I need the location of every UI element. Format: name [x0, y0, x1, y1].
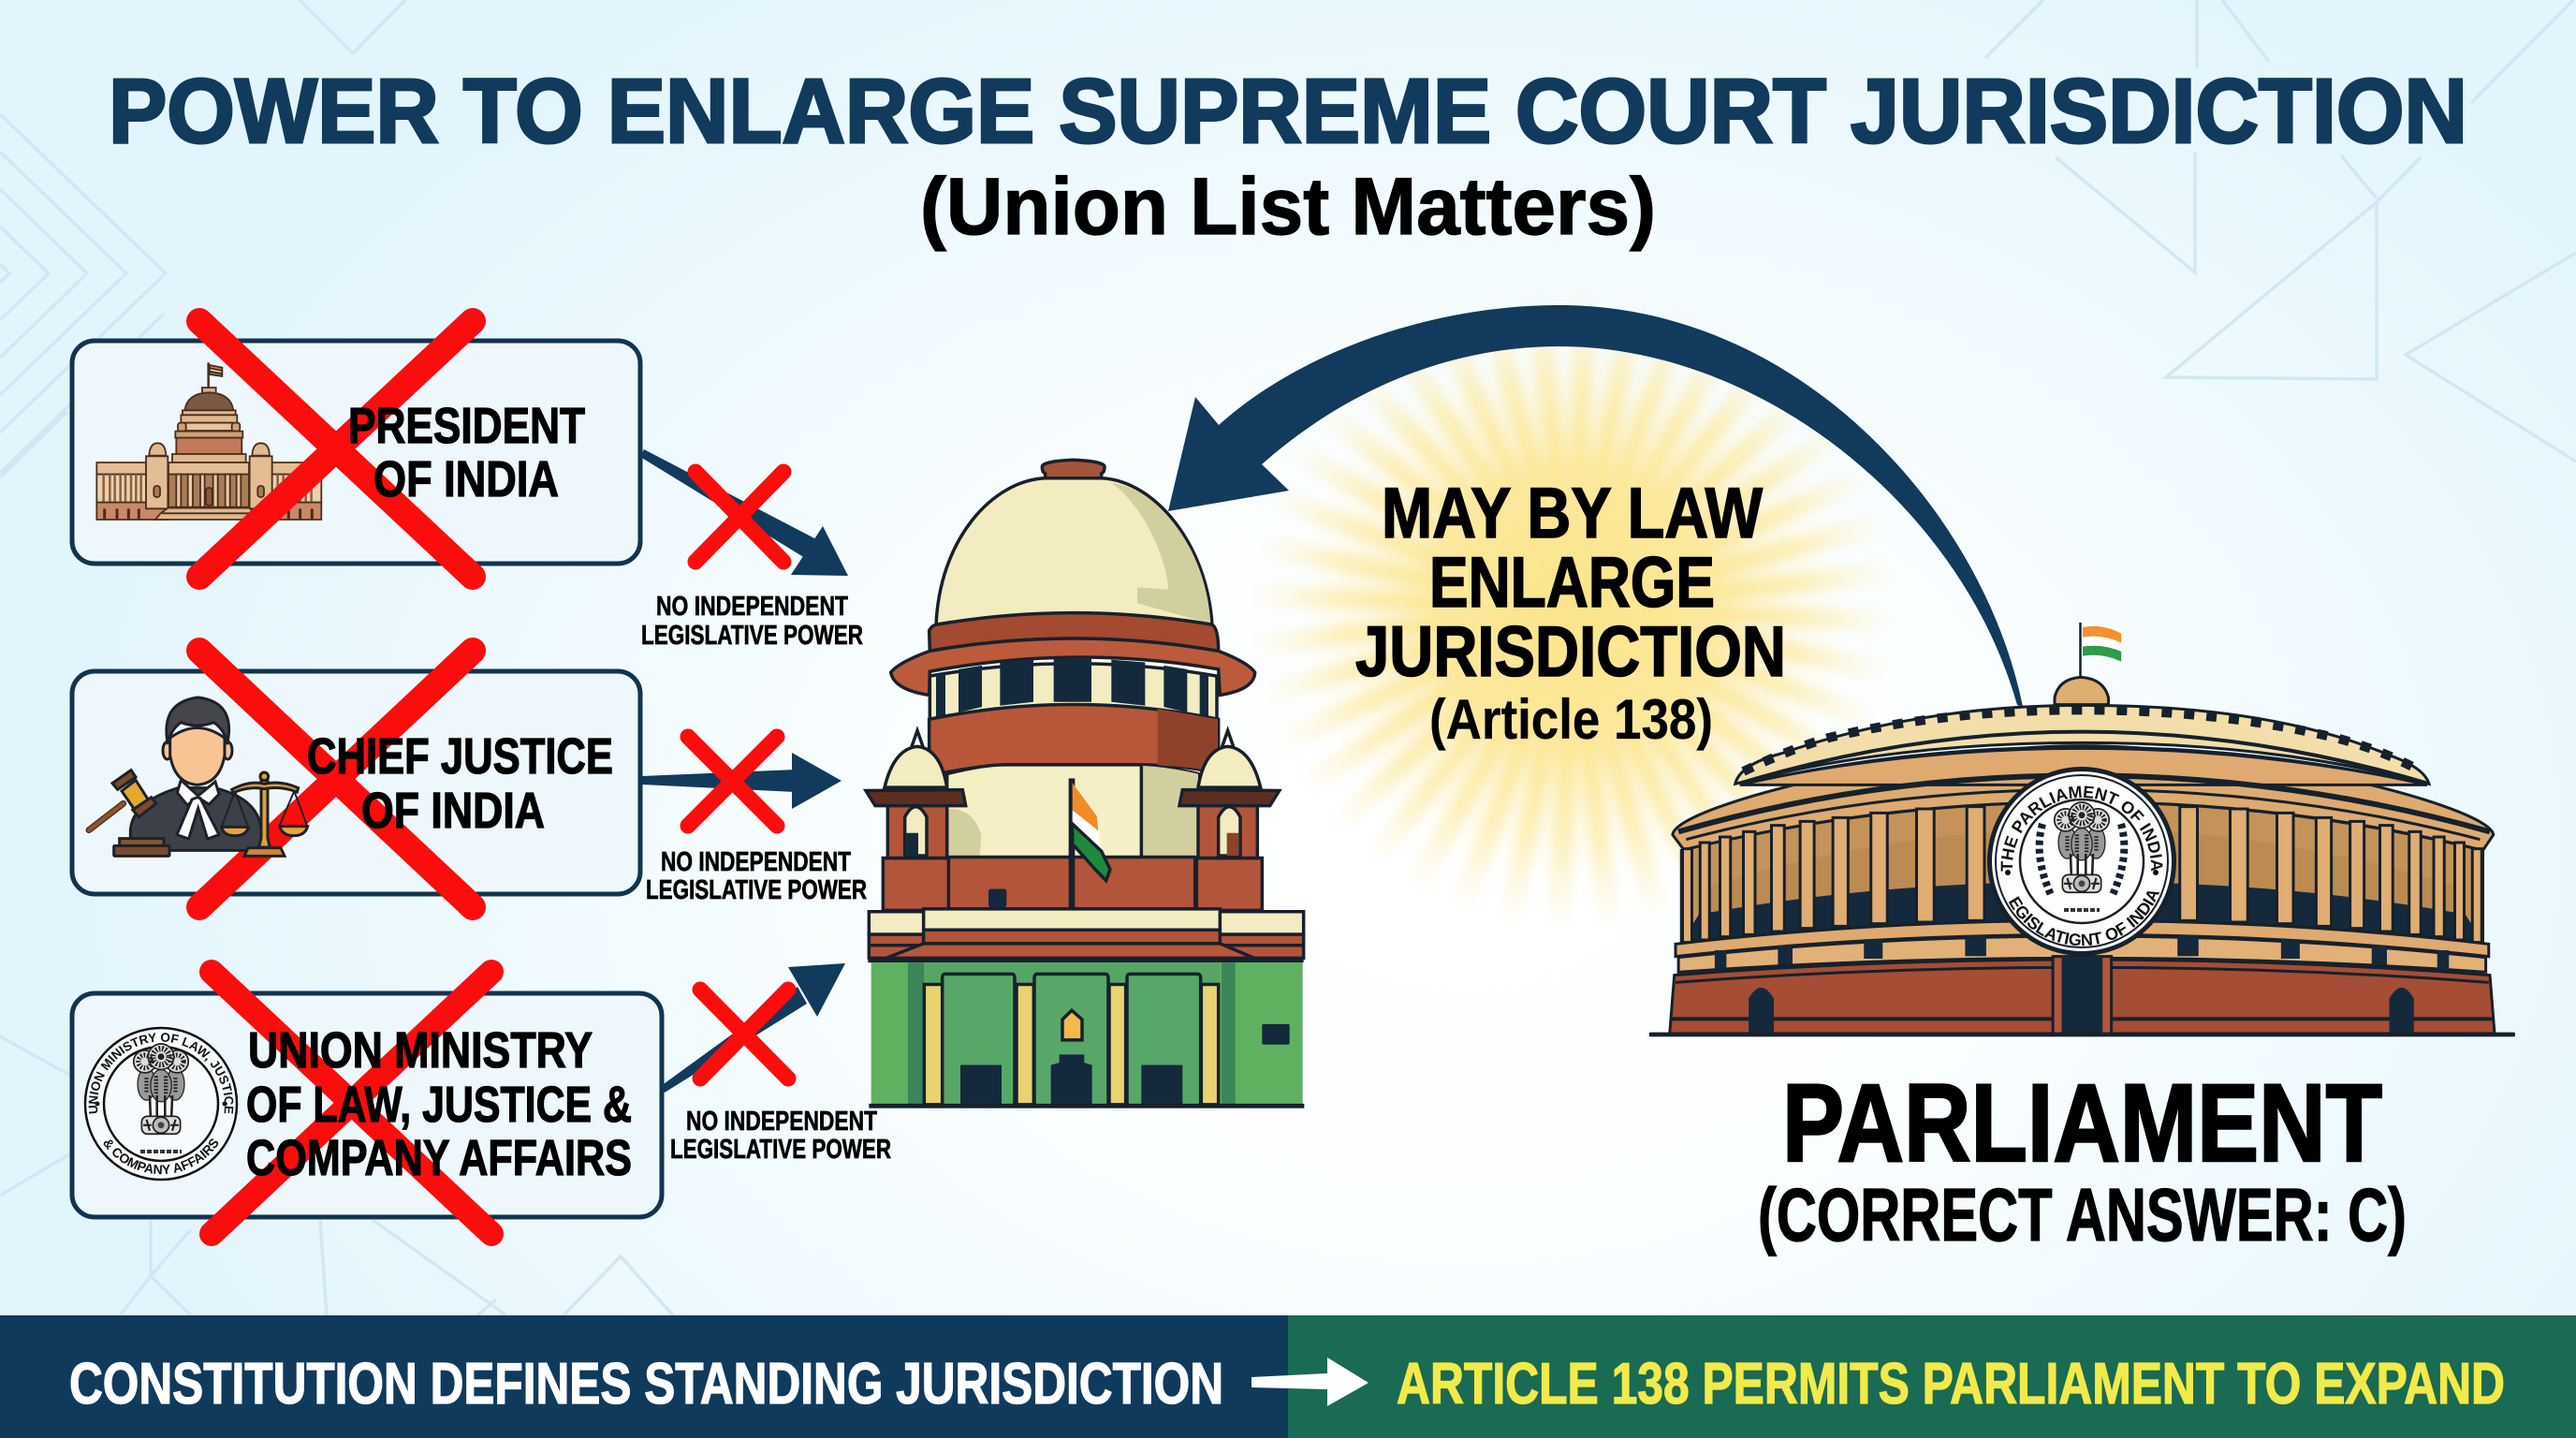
chief justice card box [72, 671, 640, 894]
red cross: chief justice [199, 651, 473, 907]
ministry label: OF LAW, JUSTICE & [246, 1077, 632, 1133]
banner arrow [1251, 1357, 1368, 1406]
chief justice label: CHIEF JUSTICE [307, 728, 613, 785]
flag [1069, 778, 1110, 908]
arrow: ministry to court [661, 963, 845, 1093]
president card box [72, 341, 640, 564]
icon: supreme court building [866, 460, 1304, 1108]
note: no independent legislative power 3 [670, 1107, 891, 1165]
president label: PRESIDENT [348, 398, 585, 454]
title: POWER TO ENLARGE SUPREME COURT JURISDICTION [109, 60, 2467, 162]
red cross: president [199, 321, 473, 577]
icon: ministry seal: & COMPANY AFFAIRS [103, 1138, 219, 1174]
parliament columns left [1683, 807, 1984, 943]
banner navy side [0, 1315, 1288, 1438]
panel: union ministry of law [69, 960, 665, 1246]
note: no independent legislative power 1: NO INDEPENDENT [656, 592, 848, 622]
ministry label: COMPANY AFFAIRS [246, 1130, 632, 1186]
small cross: president arrow [695, 472, 783, 562]
panel: president of india [72, 321, 640, 577]
icon: parliament building [1649, 623, 2515, 1037]
parliament seal: THE PARLIAMENT OF INDIA [2001, 786, 2162, 872]
central text: may by law enlarge jurisdiction: ENLARGE [1429, 543, 1715, 623]
small cross: ministry arrow [700, 990, 788, 1078]
central text: may by law enlarge jurisdiction: MAY BY LAW [1382, 474, 1763, 553]
sunburst glow [1292, 328, 1853, 889]
icon: ministry seal: UNION MINISTRY OF LAW, JUSTICE [88, 1033, 234, 1114]
parliament label: PARLIAMENT [1782, 1062, 2382, 1185]
icon: rashtrapati bhavan [96, 362, 321, 520]
icon: ministry seal [84, 1026, 238, 1181]
red cross: ministry [212, 972, 491, 1234]
ministry label: UNION MINISTRY [248, 1022, 593, 1078]
central text: may by law enlarge jurisdiction: (Article 138) [1429, 688, 1713, 751]
arrow: chief justice to court [642, 753, 842, 809]
note: no independent legislative power 3: LEGISLATIVE POWER [670, 1135, 891, 1165]
ministry label [246, 1022, 632, 1186]
note: no independent legislative power 2: NO INDEPENDENT [661, 847, 851, 877]
note: no independent legislative power 3: NO INDEPENDENT [686, 1107, 877, 1137]
chief justice label [307, 728, 613, 839]
parliament seal: LEGISLATIGNT OF INDIA [2009, 891, 2160, 946]
banner left text: CONSTITUTION DEFINES STANDING JURISDICTION [69, 1352, 1223, 1416]
icon: judge with gavel and scales [89, 697, 308, 856]
chief justice label: OF INDIA [361, 783, 545, 839]
subtitle: (Union List Matters) [920, 162, 1656, 252]
panel: chief justice of india [72, 651, 640, 907]
note: no independent legislative power 1 [641, 592, 863, 651]
central text: may by law enlarge jurisdiction: JURISDICTION [1355, 612, 1786, 692]
small cross: chief justice arrow [688, 737, 777, 826]
note: no independent legislative power 2: LEGISLATIVE POWER [646, 875, 867, 905]
banner green side [1288, 1315, 2576, 1438]
left tower [866, 730, 966, 910]
parliament columns right [2180, 807, 2481, 943]
parliament seal [1987, 767, 2176, 955]
arrow: parliament to supreme court [1168, 305, 2023, 707]
parliament flag [2080, 623, 2121, 677]
central text: may by law enlarge jurisdiction [1355, 474, 1786, 751]
arrow: president to court [640, 449, 848, 576]
ministry card box [72, 993, 662, 1217]
president label [348, 398, 585, 507]
note: no independent legislative power 1: LEGISLATIVE POWER [641, 621, 863, 651]
right tower [1179, 730, 1280, 910]
president label: OF INDIA [373, 451, 559, 507]
bottom banner [0, 1315, 2576, 1438]
note: no independent legislative power 2 [646, 847, 867, 905]
